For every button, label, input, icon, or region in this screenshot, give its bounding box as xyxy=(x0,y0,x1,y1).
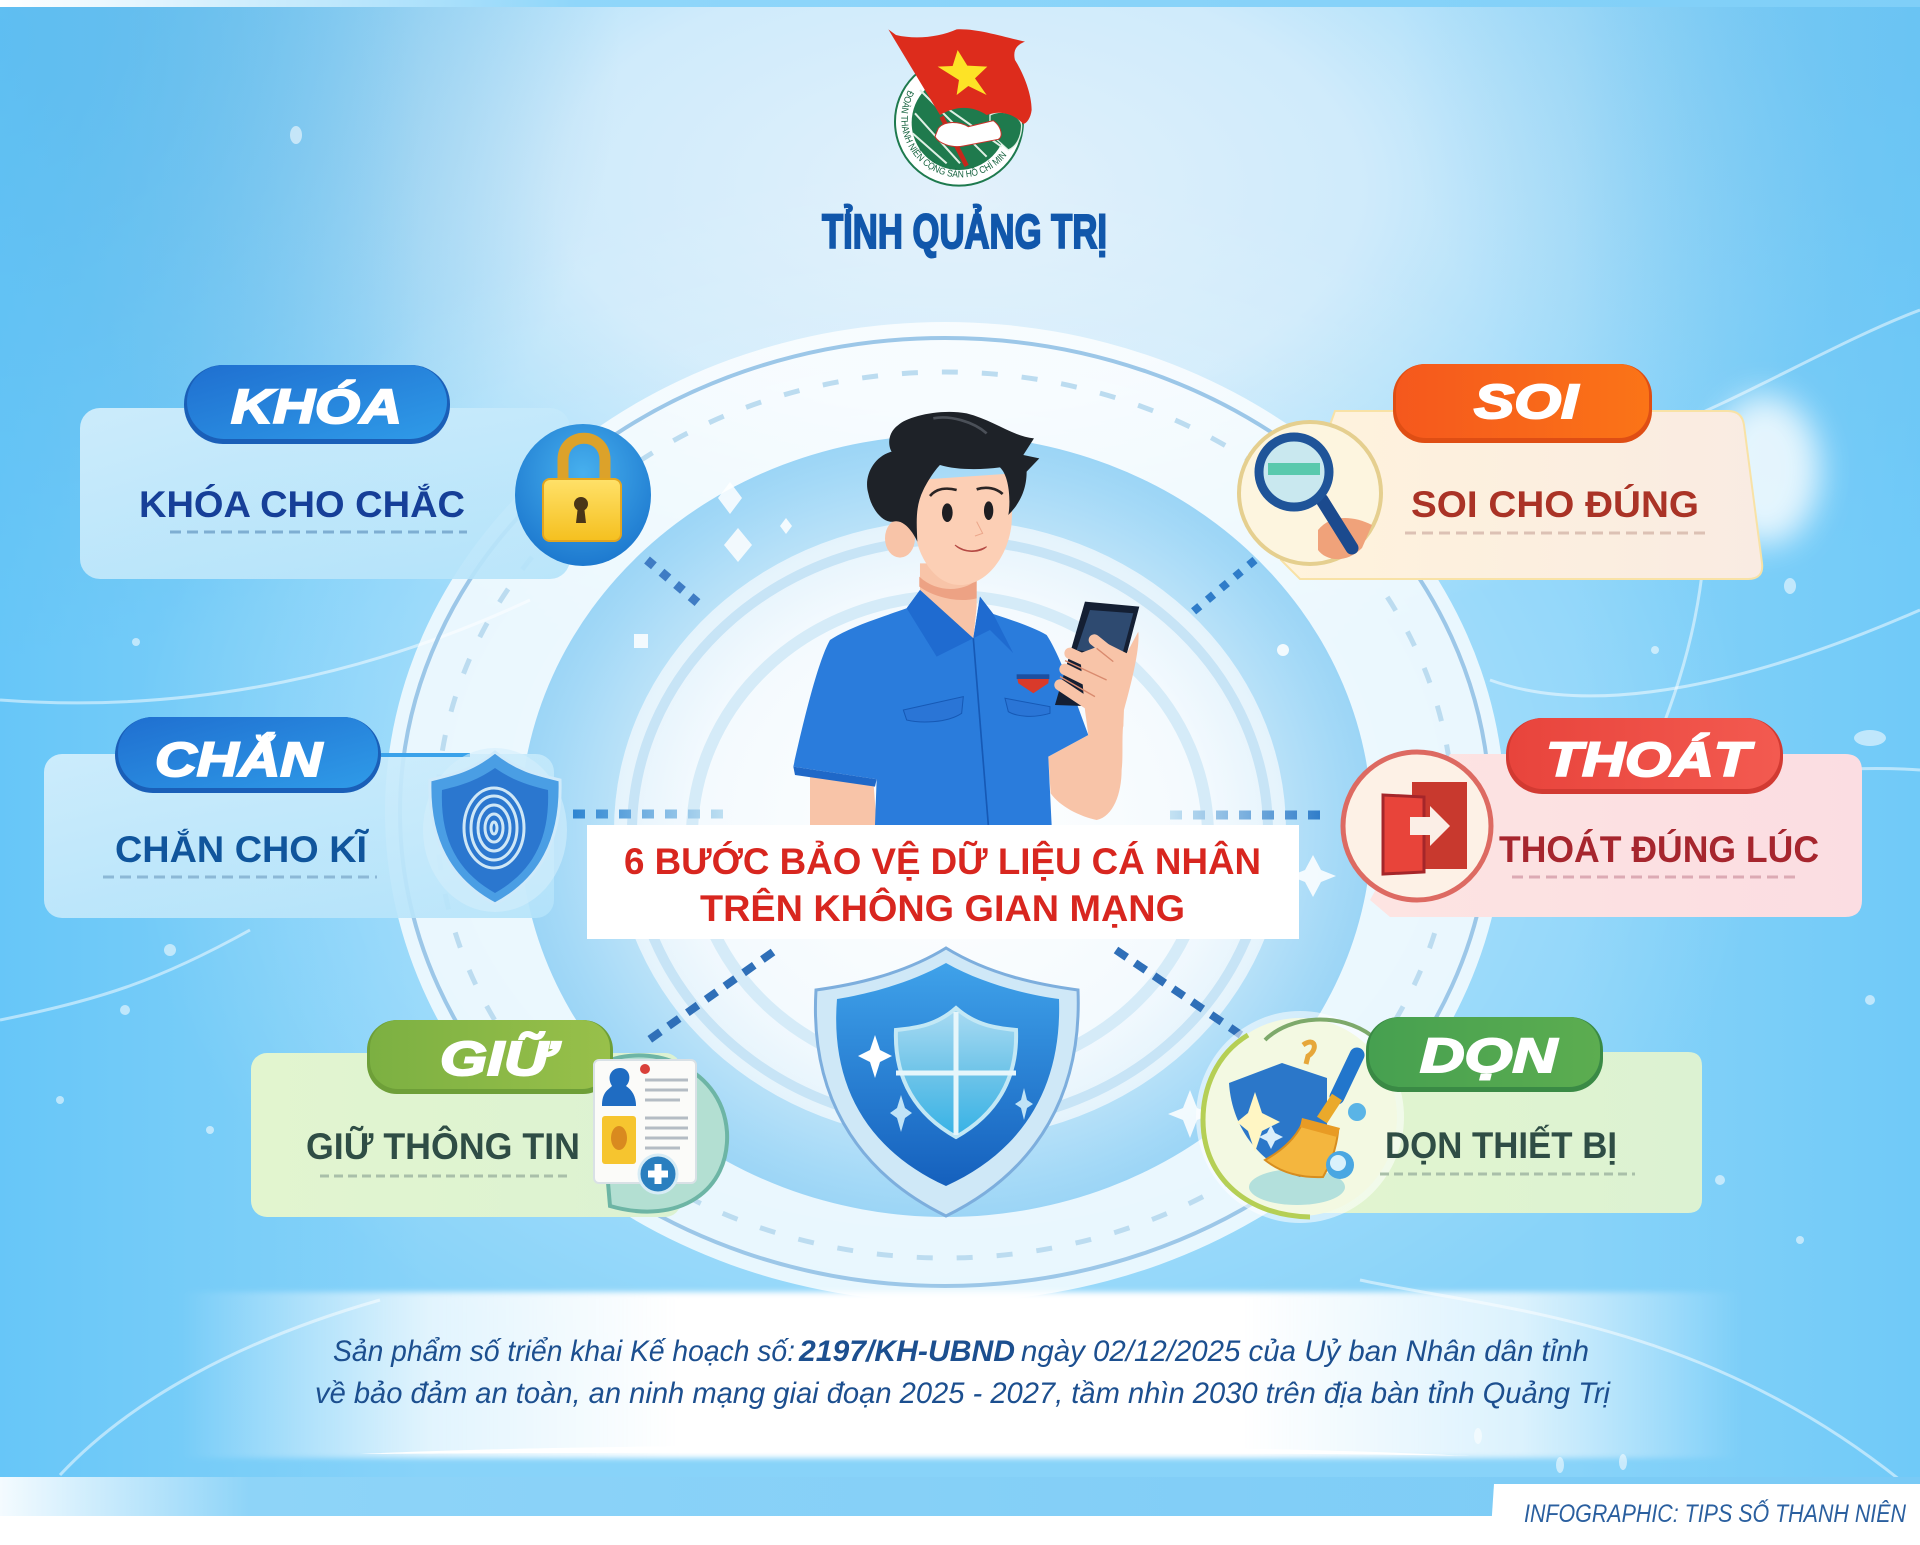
footer note: về bảo đảm an toàn, an ninh mạng giai đoạn 2025 - 2027, tầm nhìn 2030 trên địa bàn tỉnh Quảng Trị xyxy=(315,1377,1611,1410)
icon: fingerprint shield xyxy=(423,748,567,912)
footer note: ngày 02/12/2025 của Uỷ ban Nhân dân tỉnh xyxy=(1021,1335,1589,1368)
label: SOI CHO ĐÚNG xyxy=(1411,483,1699,525)
footer glow xyxy=(180,1292,1740,1458)
connector: top left xyxy=(647,560,704,608)
icon backing circle xyxy=(1196,1011,1404,1223)
card xyxy=(1300,1052,1702,1213)
panel: CHẮN xyxy=(44,717,567,918)
card xyxy=(1281,411,1762,579)
panel: KHÓA xyxy=(80,365,651,579)
icon: exit door xyxy=(1343,752,1491,900)
connector: bottom left xyxy=(646,952,773,1042)
logo: Đoàn Thanh niên badge xyxy=(888,29,1032,187)
badge: CHẮN xyxy=(155,732,324,787)
panel: THOÁT xyxy=(1343,718,1862,917)
central figure: youth union member with phone xyxy=(793,412,1139,825)
footer note: 2197/KH-UBND xyxy=(798,1335,1015,1368)
icon: padlock xyxy=(515,424,651,566)
badge xyxy=(184,365,450,444)
icon: magnifier xyxy=(1239,422,1381,564)
icon backing crescent xyxy=(598,1055,727,1212)
connector: bottom right xyxy=(1116,950,1241,1035)
footer note: Sản phẩm số triển khai Kế hoạch số: xyxy=(333,1335,795,1368)
icon: shield and broom xyxy=(1229,1042,1366,1205)
card xyxy=(44,754,554,918)
title: TỈNH QUẢNG TRỊ xyxy=(822,204,1107,259)
card xyxy=(1370,754,1862,917)
badge: GIỮ xyxy=(440,1031,561,1086)
badge xyxy=(1506,718,1783,794)
connector: top right xyxy=(1188,560,1255,616)
badge xyxy=(115,717,381,793)
card xyxy=(80,408,570,579)
badge xyxy=(1393,364,1652,443)
footer note xyxy=(315,1335,1611,1410)
panel: GIỮ xyxy=(251,1020,727,1217)
icon: identity document xyxy=(594,1060,696,1193)
badge xyxy=(1366,1017,1603,1092)
connector: middle right xyxy=(1170,810,1322,820)
banner: main heading: TRÊN KHÔNG GIAN MẠNG xyxy=(700,887,1185,929)
label: THOÁT ĐÚNG LÚC xyxy=(1499,828,1819,870)
bottom strip xyxy=(0,1477,1920,1545)
panel: SOI xyxy=(1239,364,1762,579)
badge: DỌN xyxy=(1420,1030,1559,1083)
badge: KHÓA xyxy=(231,380,402,434)
card xyxy=(251,1053,681,1217)
label: DỌN THIẾT BỊ xyxy=(1385,1125,1617,1166)
banner: main heading: 6 BƯỚC BẢO VỆ DỮ LIỆU CÁ NHÂN xyxy=(624,840,1261,882)
central shield xyxy=(815,948,1078,1216)
label: GIỮ THÔNG TIN xyxy=(306,1125,580,1167)
connector: middle left xyxy=(573,810,725,818)
label: CHẮN CHO KĨ xyxy=(115,828,370,870)
banner: main heading xyxy=(587,825,1299,939)
panel: DỌN xyxy=(1196,1011,1702,1223)
badge: SOI xyxy=(1474,376,1580,429)
badge: THOÁT xyxy=(1546,733,1755,787)
badge xyxy=(367,1020,613,1094)
concentric rings behind the figure xyxy=(385,322,1505,1302)
label: KHÓA CHO CHẮC xyxy=(139,483,465,525)
